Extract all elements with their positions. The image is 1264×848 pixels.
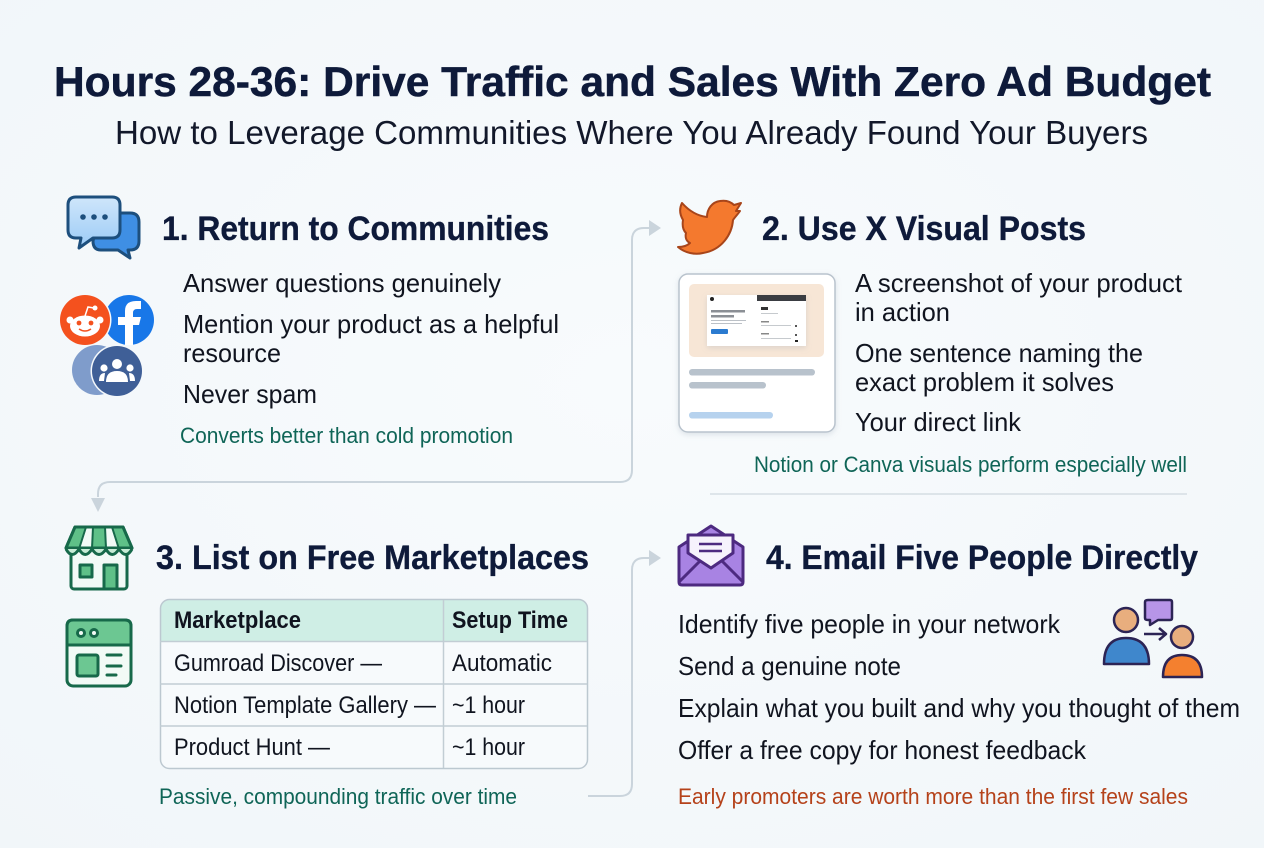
panel: 1. Return to Communities <box>58 197 559 448</box>
text: bullet list: Your direct link <box>855 407 1022 437</box>
icon: envelope <box>679 526 743 585</box>
panel: 2. Use X Visual Posts <box>678 201 1187 494</box>
icon: chat bubbles <box>68 197 139 258</box>
arrow: section 2 to section 3 <box>91 220 661 512</box>
card: post mockup <box>679 274 835 432</box>
icon: bird <box>678 201 741 254</box>
icon: facebook <box>104 295 154 345</box>
text: bullet list: Answer questions genuinely <box>183 268 501 298</box>
table: marketplaces: Product Hunt — <box>174 734 330 761</box>
table: marketplaces: ~1 hour <box>452 692 525 719</box>
callout: Notion or Canva visuals perform especially well <box>754 452 1187 477</box>
callout: Early promoters are worth more than the first few sales <box>678 784 1188 809</box>
table: marketplaces: Notion Template Gallery — <box>174 692 436 719</box>
text: bullet list <box>855 268 1183 437</box>
text: bullet list: resource <box>183 338 281 368</box>
heading: 4. Email Five People Directly <box>766 539 1198 577</box>
heading: 2. Use X Visual Posts <box>762 210 1086 248</box>
text: bullet list: Explain what you built and why you thought of them <box>678 693 1240 723</box>
subtitle: How to Leverage Communities Where You Already Found Your Buyers <box>115 114 1148 151</box>
table: marketplaces: ~1 hour <box>452 734 525 761</box>
arrow: section 3 to section 4 <box>588 550 661 796</box>
table: marketplaces: Automatic <box>452 650 552 677</box>
text: bullet list: in action <box>855 297 950 327</box>
text: bullet list: A screenshot of your product <box>855 268 1183 298</box>
text: bullet list <box>678 609 1240 765</box>
icon: storefront <box>66 527 132 589</box>
text: bullet list: exact problem it solves <box>855 367 1114 397</box>
text: bullet list: Mention your product as a helpful <box>183 309 559 339</box>
icon: reddit <box>58 294 112 346</box>
heading: 3. List on Free Marketplaces <box>156 539 589 577</box>
icon: people sharing <box>1104 600 1202 677</box>
panel: 4. Email Five People Directly <box>678 526 1240 809</box>
table: marketplaces: Gumroad Discover — <box>174 650 382 677</box>
screenshot <box>707 295 806 346</box>
text: bullet list <box>183 268 559 409</box>
text: bullet list: Identify five people in your network <box>678 609 1061 639</box>
icon: browser window <box>67 620 131 686</box>
callout: Passive, compounding traffic over time <box>159 784 517 809</box>
text: bullet list: Never spam <box>183 379 317 409</box>
table: marketplaces: Marketplace <box>174 607 301 634</box>
table: marketplaces: Setup Time <box>452 607 568 634</box>
table: marketplaces <box>160 600 588 768</box>
icon: groups <box>72 344 144 398</box>
panel: 3. List on Free Marketplaces <box>66 527 589 809</box>
text: bullet list: One sentence naming the <box>855 338 1143 368</box>
title: Hours 28-36: Drive Traffic and Sales With Zero Ad Budget <box>54 58 1211 105</box>
callout: Converts better than cold promotion <box>180 423 513 448</box>
text: bullet list: Send a genuine note <box>678 651 901 681</box>
heading: 1. Return to Communities <box>162 210 549 248</box>
text: bullet list: Offer a free copy for honest feedback <box>678 735 1087 765</box>
